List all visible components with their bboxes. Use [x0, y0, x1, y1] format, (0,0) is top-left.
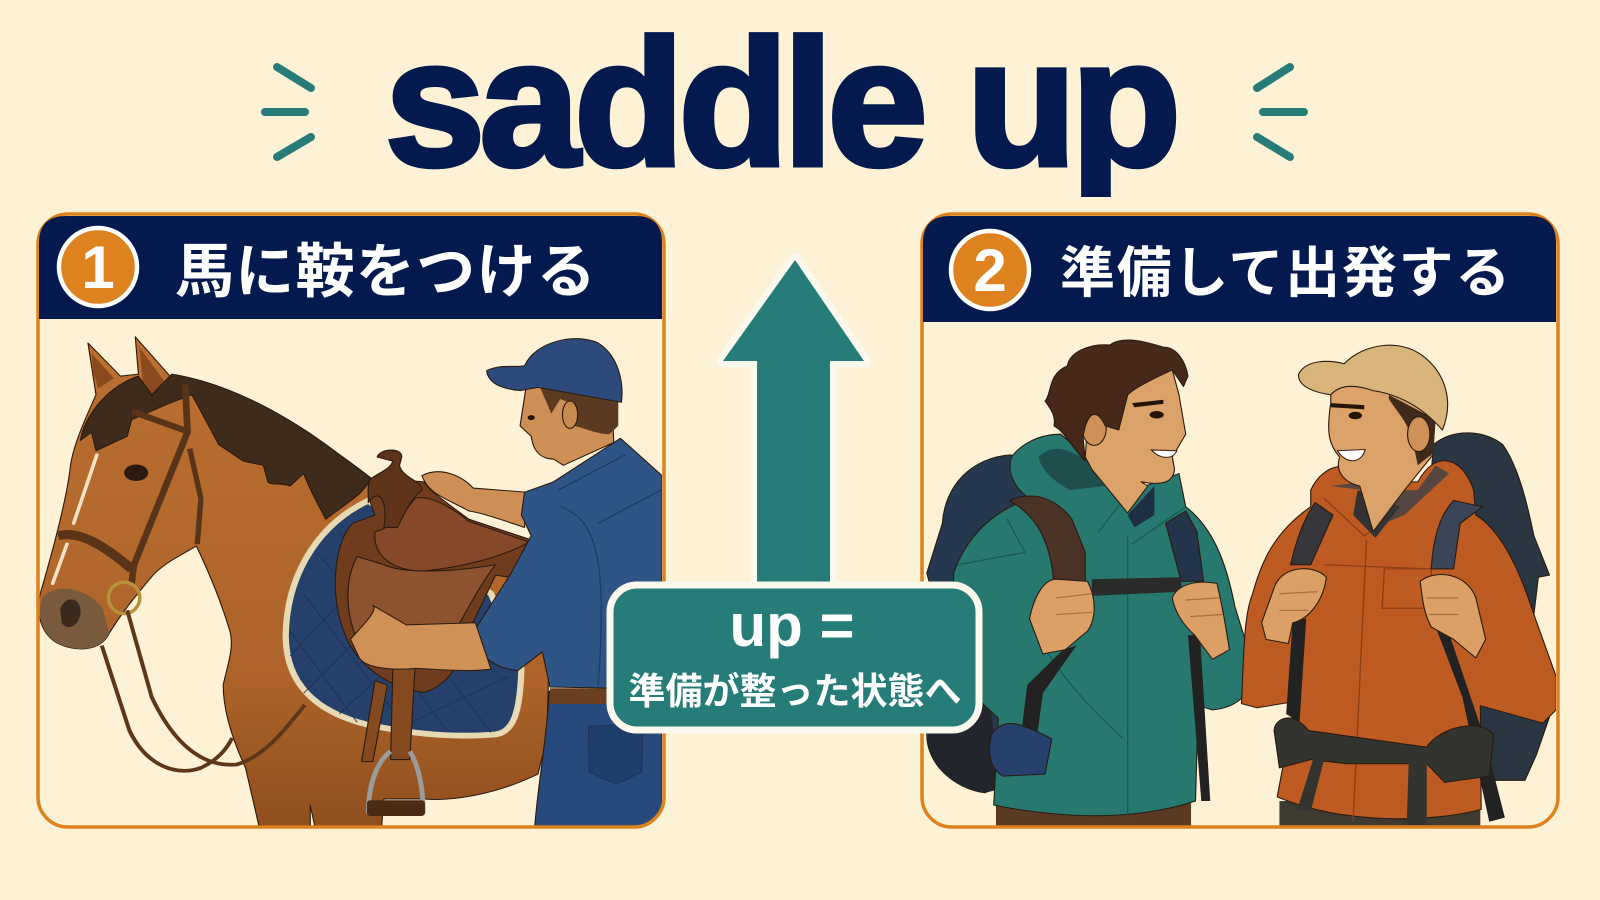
mane: [80, 374, 371, 519]
left hiker legs: [996, 803, 1191, 828]
saddle pad: [286, 501, 521, 736]
man cap: [487, 339, 622, 402]
reins: [102, 610, 305, 771]
ring: [108, 582, 140, 614]
left hiker hair: [1045, 340, 1188, 461]
blaze: [53, 455, 97, 583]
man forearm: [350, 605, 491, 670]
nostril: [60, 599, 81, 627]
left hiker ear: [1084, 415, 1107, 446]
left hiker hands: [1029, 579, 1229, 659]
number badge 2: [951, 231, 1029, 309]
right hiker backpack: [1427, 433, 1556, 780]
illustration: horse and man: [38, 337, 662, 826]
right hiker legs: [1279, 801, 1480, 828]
saddle: [335, 478, 531, 692]
right hiker collar: [1331, 465, 1449, 527]
panel: step 2 ready to depart: [922, 214, 1558, 828]
heading 2: 準備して出発する: [1060, 242, 1512, 304]
left hiker hood inner: [1038, 449, 1105, 490]
callout heading: up =: [729, 592, 855, 659]
icon: left emphasis marks: [265, 67, 311, 157]
man shirt: [474, 438, 662, 689]
bridle: [58, 384, 201, 583]
panel border: [922, 214, 1558, 827]
man ear: [562, 401, 578, 428]
left hiker straps: [1009, 496, 1210, 801]
left hiker shirt: [1128, 486, 1154, 527]
right hiker hair and ear: [1389, 395, 1436, 465]
man belt: [550, 688, 610, 704]
illustration: two hikers: [927, 340, 1556, 828]
icon: right emphasis marks: [1257, 67, 1304, 157]
right hiker face: [1331, 403, 1365, 461]
number badge 2: 2: [973, 237, 1007, 304]
number badge 1: 1: [81, 234, 115, 301]
horse muzzle: [40, 589, 109, 649]
stirrup leathers: [391, 664, 415, 760]
header bar: [923, 216, 1556, 322]
right hiker hip belt: [1274, 718, 1494, 826]
stirrup: [368, 751, 423, 813]
inner ears: [92, 353, 114, 389]
title: saddle up: [385, 3, 1181, 204]
header bar: [39, 216, 662, 319]
right hiker head: [1329, 378, 1431, 532]
right hiker hands: [1262, 569, 1486, 658]
right hiker cap: [1299, 345, 1448, 430]
man hair: [540, 388, 618, 434]
man jeans: [535, 689, 662, 826]
left hiker backpack: [926, 454, 1026, 794]
left hiker belt pack: [989, 723, 1052, 776]
arrow: up: [723, 260, 864, 590]
heading 1: 馬に鞍をつける: [175, 239, 597, 305]
callout text: 準備が整った状態へ: [628, 671, 962, 712]
man upper arm: [422, 472, 527, 527]
man eye: [528, 415, 535, 420]
horse body: [38, 337, 549, 826]
man neck and head: [520, 382, 614, 465]
panel: step 1 saddling the horse: [38, 214, 664, 827]
left hiker face: [1132, 400, 1177, 457]
left hiker jacket: [954, 434, 1253, 816]
right hiker straps: [1286, 501, 1505, 822]
callout: up meaning: [610, 585, 979, 730]
left hiker neck and head: [1085, 370, 1186, 513]
panel border: [38, 214, 664, 827]
number badge 1: [59, 228, 137, 306]
right hiker jacket: [1241, 461, 1556, 819]
eye: [124, 464, 148, 481]
